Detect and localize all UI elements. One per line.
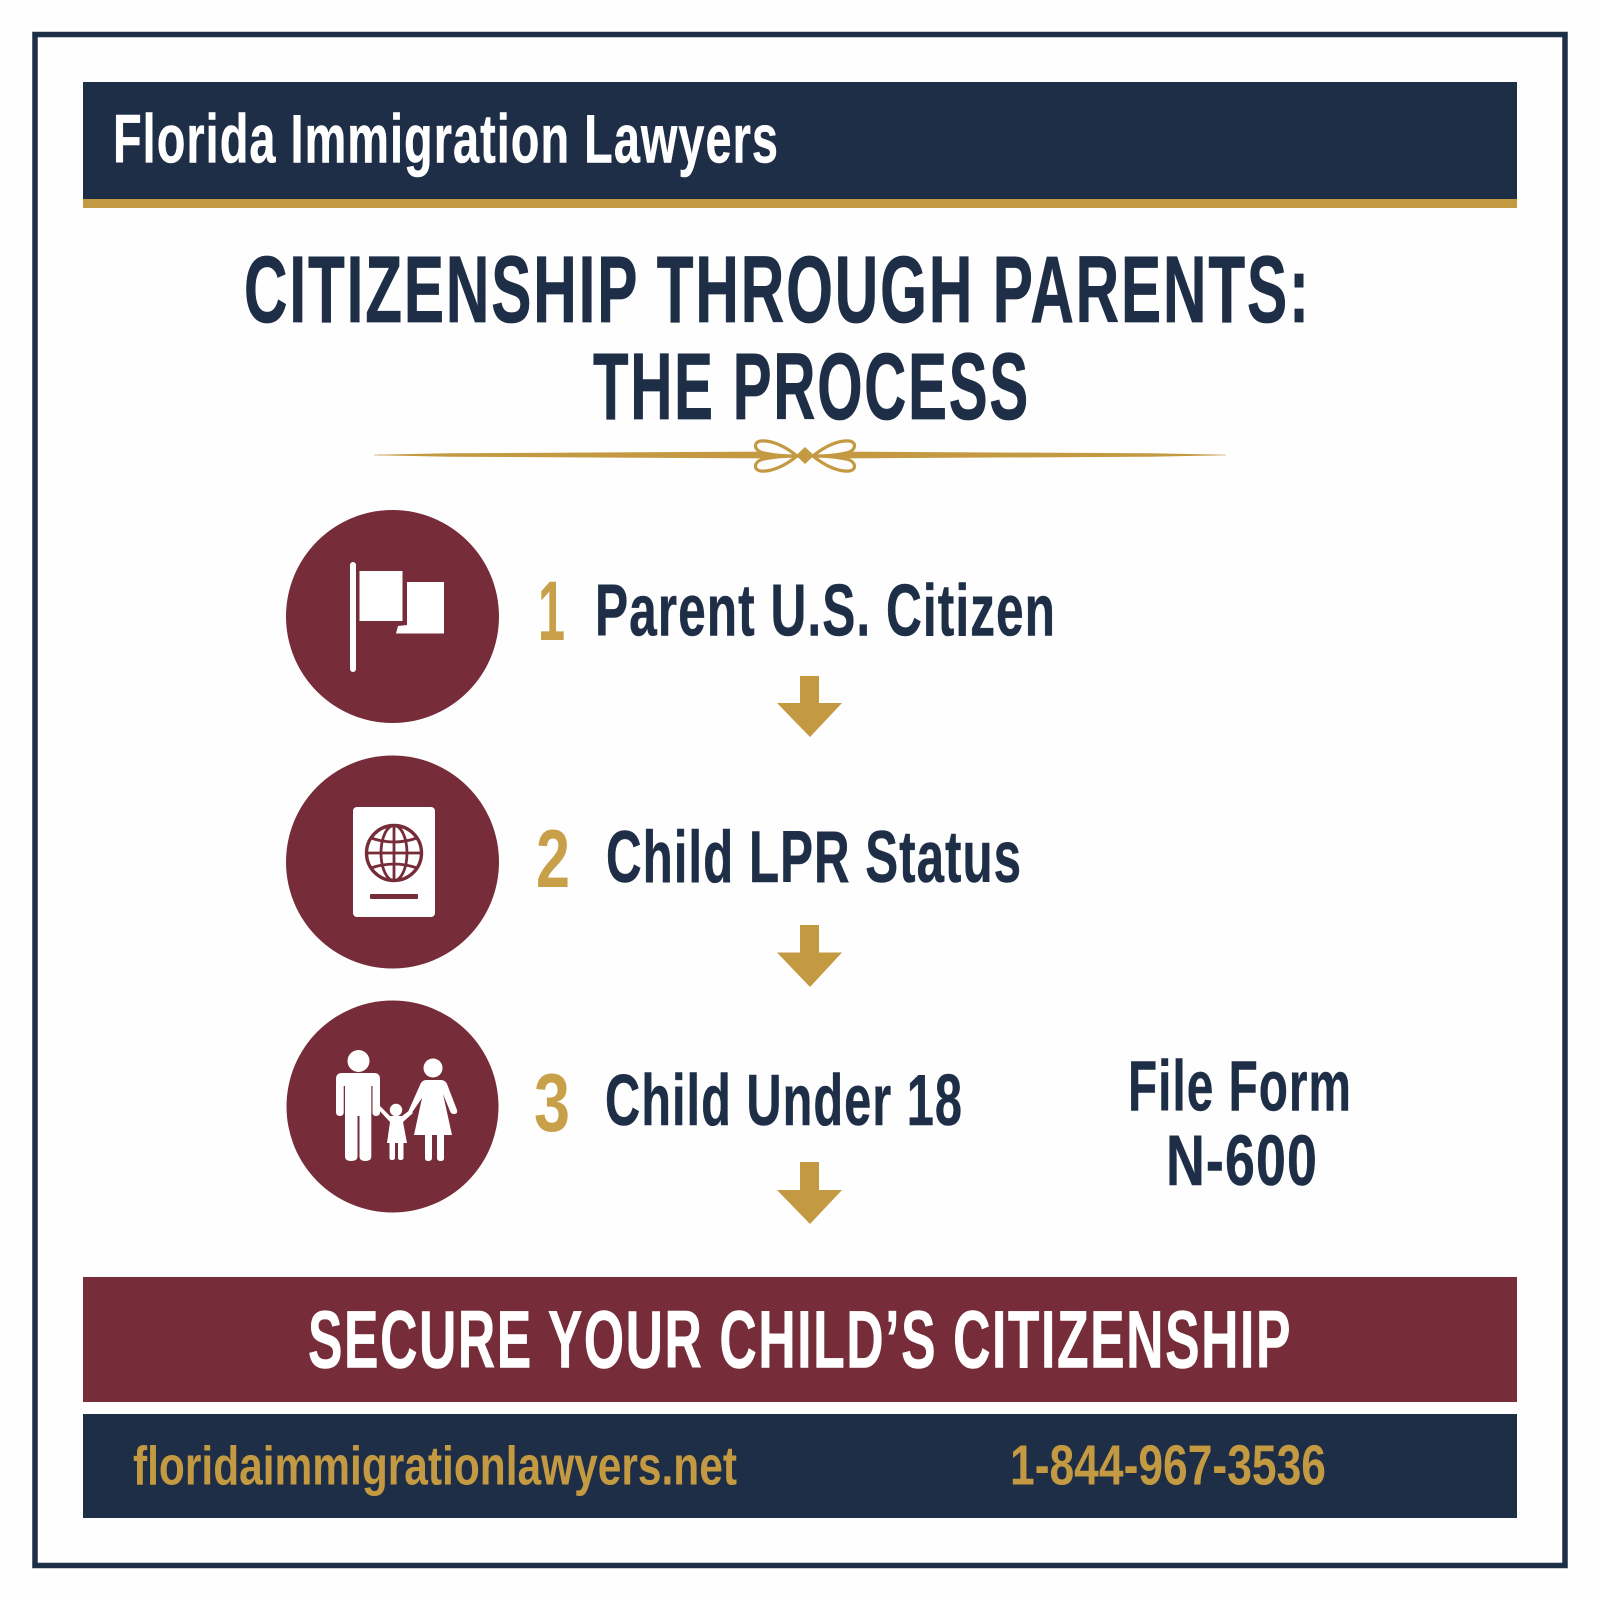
title — [244, 237, 1311, 440]
step 3 label: Child Under 18 — [605, 1061, 963, 1141]
man — [336, 1050, 380, 1161]
step 2 number: 2 — [536, 812, 570, 905]
arrow 3 — [777, 1162, 842, 1224]
final step: file form N-600: File Form — [1128, 1048, 1352, 1126]
ornamental divider — [374, 441, 1226, 471]
child — [377, 1104, 413, 1160]
call-to-action banner — [83, 1277, 1517, 1402]
title: THE PROCESS — [593, 334, 1030, 440]
step 2 circle: passport icon — [286, 756, 499, 968]
step 1 circle: flag icon — [286, 510, 499, 723]
website: floridaimmigrationlawyers.net — [133, 1434, 737, 1496]
contact footer — [83, 1414, 1517, 1518]
arrow 2 — [777, 925, 842, 987]
step 1 number: 1 — [538, 564, 565, 658]
header firm name: Florida Immigration Lawyers — [113, 100, 779, 178]
arrow 1 — [777, 676, 842, 737]
final step: file form N-600: N-600 — [1166, 1122, 1318, 1201]
woman — [408, 1058, 457, 1161]
step 3 number: 3 — [534, 1056, 570, 1149]
step 3 circle: family icon — [286, 1000, 498, 1212]
final step: file form N-600 — [1128, 1048, 1352, 1201]
step 2 label: Child LPR Status — [606, 817, 1022, 898]
phone number: 1-844-967-3536 — [1010, 1434, 1326, 1498]
header banner — [83, 82, 1517, 208]
step 1 label: Parent U.S. Citizen — [595, 570, 1056, 652]
